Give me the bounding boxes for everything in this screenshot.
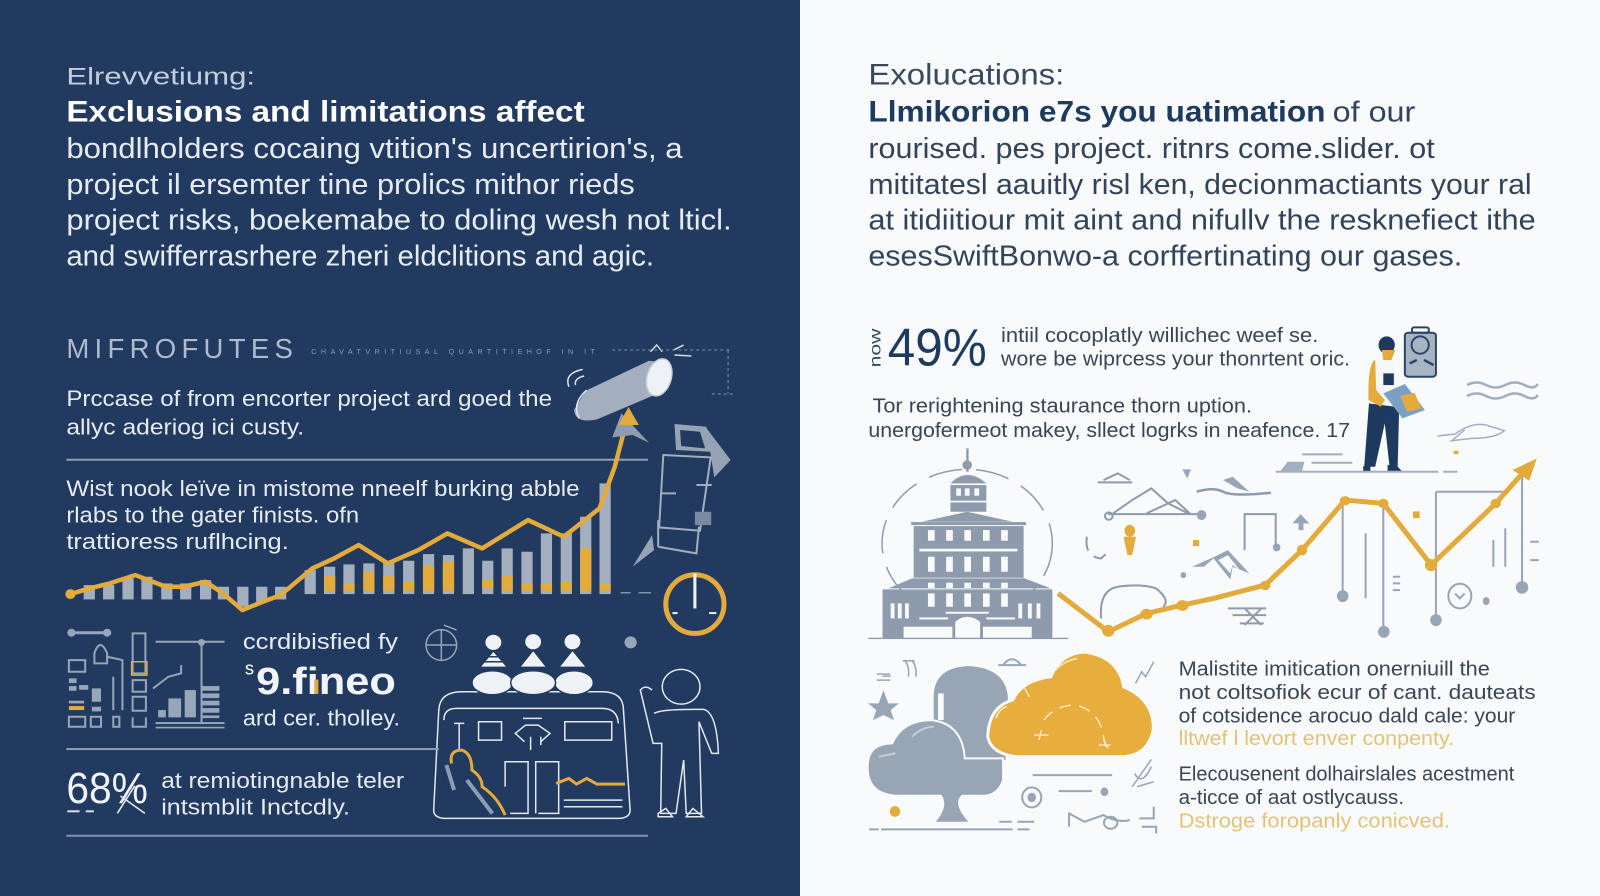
panel: left dark: [0, 0, 800, 896]
intro paragraph right: rourised. pes project. ritnrs come.slider. ot: [868, 133, 1435, 165]
eyebrow heading left: Elrevvetiumg:: [66, 64, 255, 91]
panel: right light: [800, 0, 1600, 896]
text block: lower first: [1179, 659, 1536, 750]
title left: Exclusions and limitations affect: [66, 95, 585, 128]
intro paragraph left: and swifferrasrhere zheri eldclitions and agic.: [66, 240, 654, 272]
text block: first note: allyc aderiog ici custy.: [66, 415, 304, 440]
line chart: rising gold arrow: [1058, 458, 1539, 638]
stat: 68 percent: 68%: [66, 764, 148, 813]
intro paragraph right: esesSwiftBonwo-a corffertinating our gases.: [868, 240, 1462, 272]
micro caption: CHAVATVRITIUSAL QUARTITIEHOF IN IT: [311, 348, 596, 356]
icon: small globe: [426, 625, 637, 660]
eyebrow heading right: Exolucations:: [868, 59, 1064, 92]
text block: second note: rlabs to the gater finists. ofn: [66, 502, 359, 527]
text block: lower first: Malistite imitication onerniuill the: [1179, 659, 1490, 681]
text block: lower second: [1179, 764, 1515, 833]
text block: first note: Prccase of from encorter project ard goed the: [66, 386, 552, 411]
icon: mountains and small marks: [1086, 469, 1420, 625]
text block: second note: trattioress ruflhcing.: [66, 529, 289, 554]
intro paragraph right: mititatesl aauitly risl ken, decionmactiants your ral: [868, 169, 1532, 201]
text block: right note: [868, 395, 1350, 442]
text block: second note: Wist nook leïve in mistome nneelf burking abble: [66, 476, 580, 501]
icon: machine with three figures: [434, 633, 630, 818]
stat: 49 percent: now: [868, 327, 885, 367]
intro paragraph right: at itidiitiour mit aint and nifullv the resknefiect ithe: [868, 205, 1536, 237]
section heading left: MIFROFUTES: [66, 333, 293, 364]
text block: first note: [66, 386, 552, 440]
stat: funding figure: 9.fineo: [256, 660, 396, 702]
icon: waves and bird: [1437, 383, 1538, 454]
icon: city and bar sketch: [67, 629, 224, 728]
stat: 49 percent: intiil cocoplatly willichec weef se.: [1001, 325, 1318, 347]
icon: standing figure outline: [640, 669, 718, 817]
text block: second note: [66, 476, 580, 554]
stat: 49 percent: 49%: [888, 318, 987, 377]
icon: telescope: [568, 358, 675, 443]
stat: funding figure: ccrdibisfied fy: [243, 629, 399, 654]
icon: blueprint frame with flag: [633, 424, 731, 567]
title right: of our: [1333, 96, 1416, 128]
stat: 68 percent: intsmblit Inctcdly.: [161, 794, 350, 819]
decorative sketch marks: [612, 345, 736, 394]
text block: lower first: not coltsofiok ecur of cant. dauteats: [1179, 682, 1536, 704]
text block: lower second: Dstroge foropanly conicved.: [1179, 811, 1450, 833]
text block: lower first: of cotsidence arocuo dald cale: your: [1179, 706, 1516, 728]
icon: clouds and tree: [868, 652, 1156, 833]
intro paragraph left: [66, 133, 732, 272]
stat: funding figure: s: [245, 658, 254, 679]
icon: gold gauge: [666, 573, 724, 633]
bar and line chart: [65, 407, 651, 610]
intro paragraph left: project il ersemter tine prolics mithor rieds: [66, 169, 635, 201]
title right: Llmikorion e7s you uatimation: [868, 95, 1326, 128]
icon: building with dashed halo: [868, 448, 1068, 639]
stat: 49 percent: wore be wiprcess your thonrtent oric.: [1000, 348, 1350, 370]
text block: right note: Tor rerightening staurance thorn uption.: [872, 395, 1252, 417]
stat: 68 percent: [66, 764, 405, 819]
intro paragraph left: project risks, boekemabe to doling wesh not lticl.: [66, 205, 732, 237]
stat: 68 percent: at remiotingnable teler: [161, 768, 405, 793]
stat: funding figure: ard cer. tholley.: [243, 706, 400, 731]
text block: lower first: lltwef l levort enver conpenty.: [1179, 728, 1454, 750]
text block: lower second: a-ticce of aat ostlycauss.: [1179, 787, 1404, 809]
stat: 49 percent: [868, 318, 1350, 377]
icon: worker with tablet: [1276, 327, 1457, 472]
text block: lower second: Elecousenent dolhairslales acestment: [1179, 764, 1515, 786]
intro paragraph right: [868, 133, 1536, 272]
intro paragraph left: bondlholders cocaing vtition's uncertirion's, a: [66, 133, 683, 165]
text block: right note: unergofermeot makey, sllect logrks in neafence. 17: [868, 420, 1350, 442]
stat: funding figure: [243, 629, 400, 731]
